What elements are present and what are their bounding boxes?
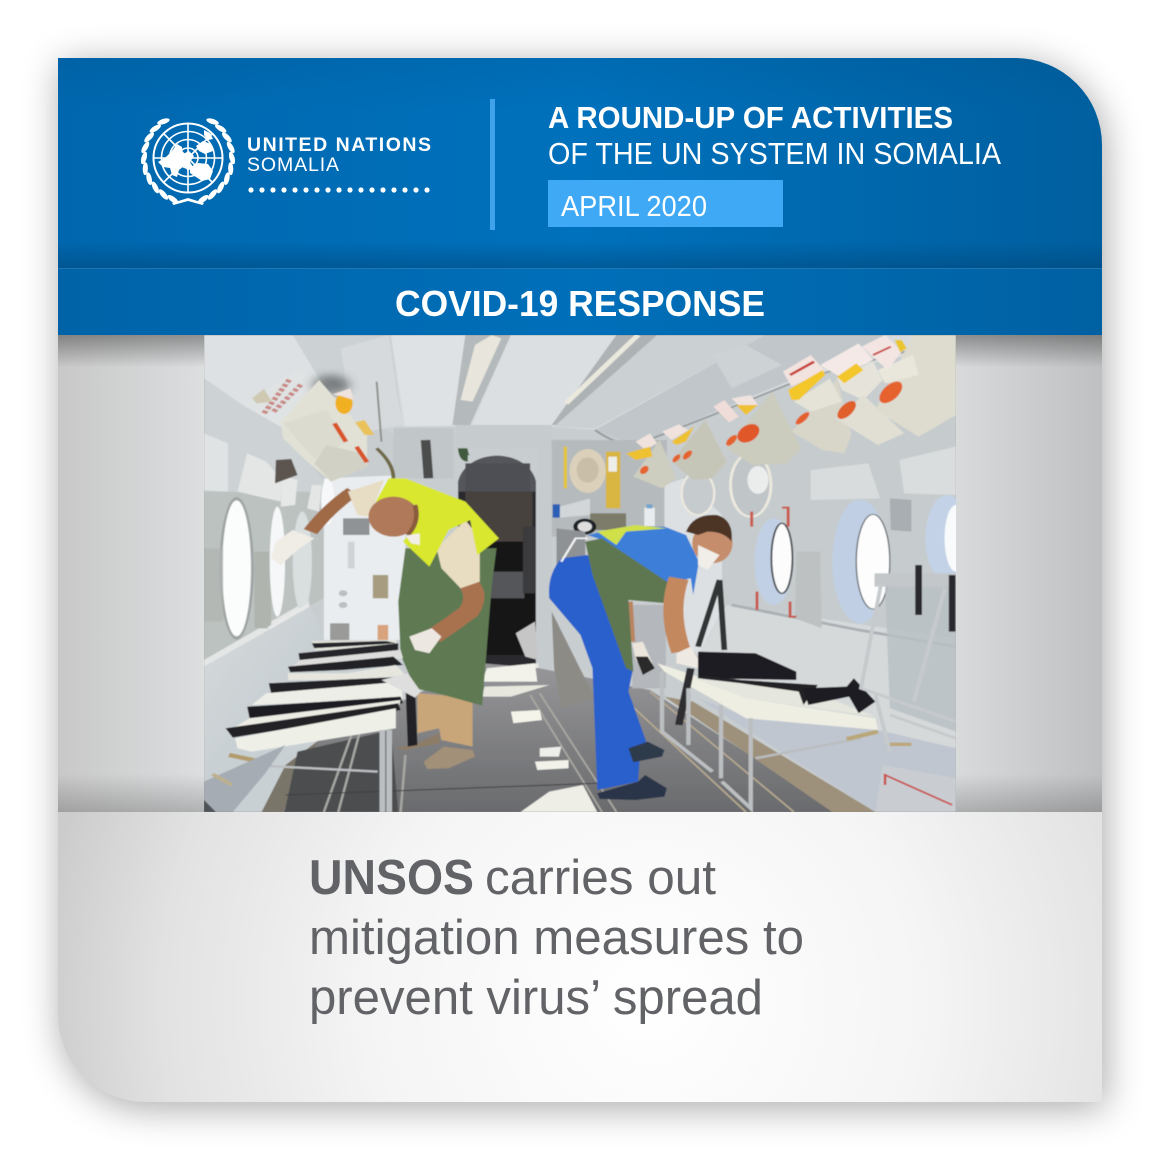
stretcher: right [657, 580, 878, 808]
photo: crew preparing helicopter cabin stretchers [204, 335, 969, 812]
man on left: apron, vest and arms [271, 478, 499, 769]
stretchers: left [204, 640, 421, 812]
panel: lower caption background [58, 812, 1102, 1102]
caption text: mitigation measures to [309, 911, 804, 965]
date badge: APRIL 2020 [561, 191, 707, 223]
folded seat frame at right [861, 565, 956, 752]
divider line [490, 99, 495, 230]
survival bags: right [626, 335, 956, 488]
caption text: prevent virus’ spread [309, 971, 763, 1025]
logo: United Nations emblem [140, 117, 236, 205]
windows: right side [682, 453, 969, 628]
man on right: blue overalls, apron [549, 515, 733, 800]
caption text [309, 851, 804, 1025]
heading: round-up title: A ROUND-UP OF ACTIVITIES [548, 100, 953, 135]
left wall [204, 336, 470, 686]
caption text: UNSOS [309, 851, 474, 905]
survival bags: left [281, 380, 381, 482]
cabin ceiling [312, 335, 914, 809]
pouches: left wall [204, 389, 322, 512]
date badge [548, 180, 783, 227]
caption text: carries out [485, 851, 716, 905]
perforated grid behind man [632, 605, 666, 688]
rear bulkhead and cockpit door [456, 425, 667, 682]
icon: globe [154, 124, 222, 192]
panel: middle grey background [58, 334, 1102, 812]
icon: olive wreath [140, 117, 236, 205]
logo text: United Nations Somalia [247, 134, 431, 193]
banner: COVID-19 response [58, 268, 1102, 335]
logo text: United Nations Somalia: SOMALIA [247, 154, 339, 176]
heading: round-up title: OF THE UN SYSTEM IN SOMALIA [548, 136, 1001, 171]
right wall [664, 447, 956, 748]
banner: COVID-19 response: COVID-19 RESPONSE [395, 283, 765, 324]
hat and equipment on bulkhead [553, 447, 655, 568]
floor [262, 663, 956, 812]
windows: left side [204, 478, 334, 640]
heading: round-up title [548, 100, 1001, 171]
panel: blue header [58, 58, 1102, 268]
dotted rule [248, 187, 430, 193]
logo text: United Nations Somalia: UNITED NATIONS [247, 134, 431, 156]
